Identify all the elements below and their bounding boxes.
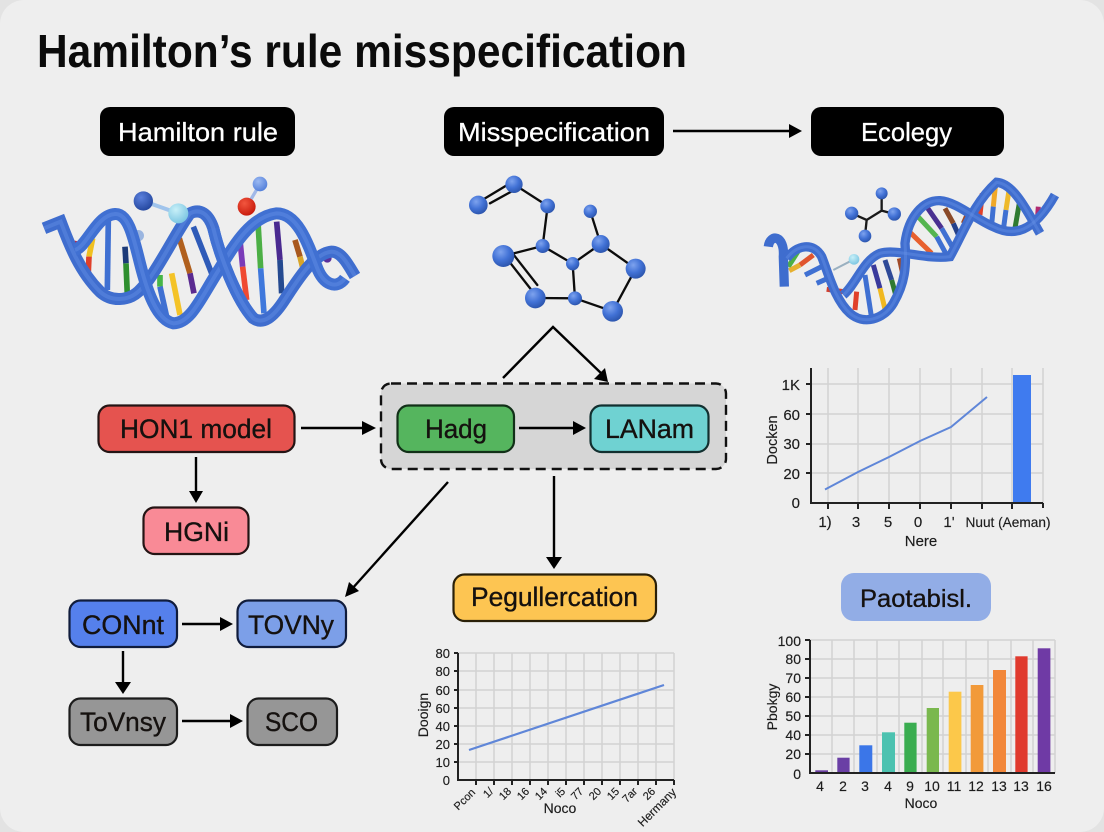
node: LANam: [590, 406, 708, 452]
arrow: CONnt to TOVNy: [182, 617, 233, 631]
y axis title: Pbokgy: [764, 684, 780, 730]
y axis labels: 60: [785, 689, 801, 705]
x axis title: Noco: [544, 800, 577, 816]
x axis labels: 11: [947, 778, 961, 794]
x axis labels: 1/: [481, 785, 497, 801]
x axis labels: 7ar: [620, 785, 640, 805]
bars: [815, 648, 1050, 773]
node: TOVNy: [238, 600, 346, 647]
heading: Hamilton rule: Hamilton rule: [118, 117, 278, 147]
node: HON1 model: [98, 406, 294, 452]
label: Paotabisl.: [841, 573, 991, 621]
node: HON1 model: HON1 model: [120, 414, 272, 444]
node: SCO: [248, 698, 337, 745]
y axis title: Dooign: [415, 693, 431, 737]
node: HGNi: [144, 508, 248, 554]
x axis labels: i5: [554, 786, 568, 800]
y axis labels: 80: [436, 664, 450, 679]
x axis labels: 13: [1013, 778, 1029, 794]
x axis labels: 0: [914, 514, 922, 531]
y axis labels: 1K: [782, 377, 800, 394]
x axis labels: 16: [515, 786, 532, 803]
node: SCO: SCO: [265, 707, 318, 737]
arrow: peaked connector into dashed box: [503, 327, 608, 382]
arrow: ToVnsy to SCO: [182, 714, 243, 728]
title: Hamilton’s rule misspecification: [37, 25, 687, 77]
heading: Misspecification: Misspecification: [458, 117, 650, 147]
y axis labels: 60: [436, 701, 450, 716]
x axis labels: [818, 514, 1050, 550]
label: Paotabisl.: Paotabisl.: [860, 585, 972, 613]
y axis labels: 50: [785, 708, 801, 724]
y axis labels: 100: [778, 633, 801, 649]
x axis labels: 13: [991, 778, 1007, 794]
node: LANam: LANam: [605, 414, 694, 444]
x axis labels: 10: [924, 778, 940, 794]
arrow: HON1 to HGNi: [189, 457, 203, 503]
node: Pegullercation: Pegullercation: [471, 582, 638, 612]
y axis labels: 40: [436, 719, 450, 734]
x axis labels: 1': [943, 514, 955, 531]
x axis labels: 20: [587, 786, 604, 803]
x axis labels: Nere: [905, 533, 937, 550]
x axis labels: 5: [884, 514, 892, 531]
node: ToVnsy: ToVnsy: [80, 707, 166, 737]
icon: DNA helix right: [768, 182, 1055, 320]
y axis labels: 40: [785, 727, 801, 743]
x axis labels: 14: [533, 786, 550, 803]
heading: Hamilton rule: [100, 107, 295, 156]
y axis labels: 0: [443, 773, 450, 788]
heading: Ecology: Ecolegy: [861, 117, 952, 147]
icon: ball and stick molecule: [469, 176, 646, 322]
chart: line and bar chart, top right: [765, 368, 1050, 550]
chart: rainbow bar chart, bottom right: [764, 633, 1055, 811]
y axis labels: [778, 633, 801, 782]
y axis labels: [436, 646, 450, 788]
trend line: [469, 685, 664, 750]
node: HGNi: HGNi: [164, 517, 229, 547]
node: ToVnsy: [70, 698, 177, 745]
heading: Ecology: [811, 107, 1004, 156]
x axis labels: 1): [818, 514, 832, 531]
node: CONnt: CONnt: [82, 610, 164, 640]
arrow: misspecification to ecology: [673, 124, 802, 138]
y axis labels: 80: [436, 646, 450, 661]
x axis labels: 3: [861, 778, 869, 794]
x axis labels: 4: [884, 778, 892, 794]
node: Hadg: Hadg: [425, 414, 487, 444]
panel: dashed group: [381, 384, 726, 469]
x axis labels: [452, 785, 679, 830]
y axis labels: 0: [792, 495, 800, 512]
x axis labels: Hermany: [635, 785, 679, 830]
y axis labels: 20: [785, 746, 801, 762]
node: CONnt: [70, 600, 177, 647]
x axis labels: 3: [852, 514, 860, 531]
x axis labels: 26: [641, 786, 658, 803]
x axis labels: 77: [569, 786, 586, 803]
x axis labels: 2: [839, 778, 847, 794]
y axis labels: 60: [436, 683, 450, 698]
y axis labels: 70: [785, 670, 801, 686]
y axis labels: 60: [783, 407, 800, 424]
chart: line chart, bottom centre: [415, 646, 679, 830]
node: TOVNy: TOVNy: [248, 610, 334, 640]
x axis labels: 18: [497, 786, 514, 803]
node: Pegullercation: [454, 574, 656, 621]
y axis labels: 20: [436, 737, 450, 752]
y axis labels: 0: [793, 766, 801, 782]
x axis labels: 12: [968, 778, 984, 794]
y axis title: Docken: [765, 415, 781, 465]
arrow: Hadg to LANam: [519, 421, 586, 435]
icon: DNA helix left: [44, 177, 355, 323]
trend line: [825, 397, 987, 490]
arrow: dashed box to Pegullercation: [546, 476, 562, 569]
y axis labels: 30: [783, 436, 800, 453]
arrow: CONnt to ToVnsy: [115, 651, 131, 694]
arrow: dashed box to TOVNy: [345, 482, 448, 597]
y axis labels: 80: [785, 651, 801, 667]
y axis labels: [782, 377, 800, 512]
x axis labels: 16: [1036, 778, 1052, 794]
x axis labels: Nuut (Aeman): [966, 514, 1050, 530]
x axis labels: 9: [906, 778, 914, 794]
x axis labels: 4: [816, 778, 824, 794]
x axis labels: Pcon: [452, 787, 478, 813]
x axis labels: [816, 778, 1052, 794]
y axis labels: 20: [783, 466, 800, 483]
x axis title: Noco: [905, 795, 938, 811]
heading: Misspecification: [444, 107, 664, 156]
node: Hadg: [398, 406, 514, 452]
arrow: HON1 to dashed box: [301, 421, 376, 435]
y axis labels: 10: [436, 755, 450, 770]
bar: [1013, 375, 1031, 503]
x axis labels: 15: [605, 786, 622, 803]
